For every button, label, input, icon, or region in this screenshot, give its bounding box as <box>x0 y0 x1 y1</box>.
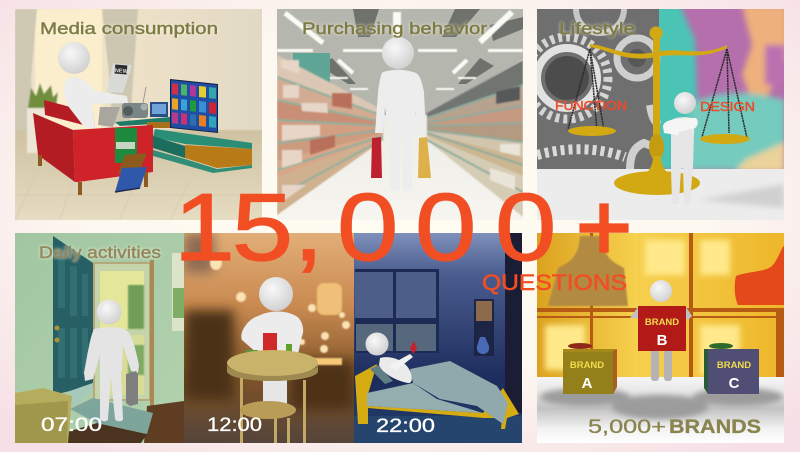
figure reading newspaper: NEWS <box>115 68 132 75</box>
window <box>355 269 439 353</box>
marble paint <box>655 5 787 172</box>
cafe table with figure <box>227 277 318 443</box>
icon: handbag <box>548 236 628 306</box>
panel: brands <box>537 233 784 443</box>
time: 12:00: 12:00 <box>207 415 262 436</box>
panel: lifestyle <box>526 0 787 220</box>
left shelves <box>277 55 523 217</box>
box brand C: BRAND <box>717 360 751 371</box>
figure holding brand B: B <box>657 332 668 349</box>
icon: television with apps <box>170 79 218 133</box>
gears <box>537 9 662 169</box>
subheading: questions: QUESTIONS <box>482 270 627 295</box>
panel: daily activities 12:00 <box>184 233 354 443</box>
figure holding brand B: BRAND <box>645 317 679 328</box>
time: 22:00: 22:00 <box>376 416 435 437</box>
icon: teal tv stand <box>115 117 252 173</box>
right shelves <box>427 60 523 118</box>
panel: purchasing behavior <box>277 9 523 220</box>
icon: red sofa <box>33 100 153 195</box>
figure with crossed arms <box>663 92 698 204</box>
icon: magazine rack <box>115 128 147 192</box>
figure with shopping bags <box>371 37 431 191</box>
door <box>53 236 93 395</box>
box brand C: C <box>729 375 740 392</box>
panel: daily activities 22:00 <box>354 233 522 443</box>
icon: balance scale <box>568 26 750 195</box>
heading: purchasing behavior: Purchasing behavior <box>302 20 488 38</box>
box brand A <box>563 343 617 394</box>
big number: 15,000+: 15,000 <box>174 173 556 280</box>
figure holding brand B <box>630 280 692 381</box>
icon: vase <box>477 337 489 354</box>
bed with figure <box>355 332 519 429</box>
heading: media consumption: Media consumption <box>40 20 218 38</box>
box brand A: A <box>582 375 593 392</box>
icon: red bag <box>735 246 784 305</box>
heading: lifestyle: Lifestyle <box>559 20 635 38</box>
box brand C <box>704 343 759 394</box>
brands caption: 5,000+ BRANDS <box>588 417 761 438</box>
heading: daily activities: Daily activities <box>39 244 161 262</box>
panel: media consumption <box>15 9 262 220</box>
time: 07:00: 07:00 <box>41 415 102 436</box>
label: design: DESIGN <box>700 99 755 114</box>
panel: daily activities 07:00 <box>15 233 184 443</box>
icon: radio <box>122 87 168 118</box>
box brand A: BRAND <box>570 360 604 371</box>
label: function: FUNCTION <box>555 98 627 113</box>
figure with briefcase <box>84 300 139 421</box>
big number: 15,000+: + <box>576 174 632 281</box>
figure reading newspaper <box>58 42 132 128</box>
